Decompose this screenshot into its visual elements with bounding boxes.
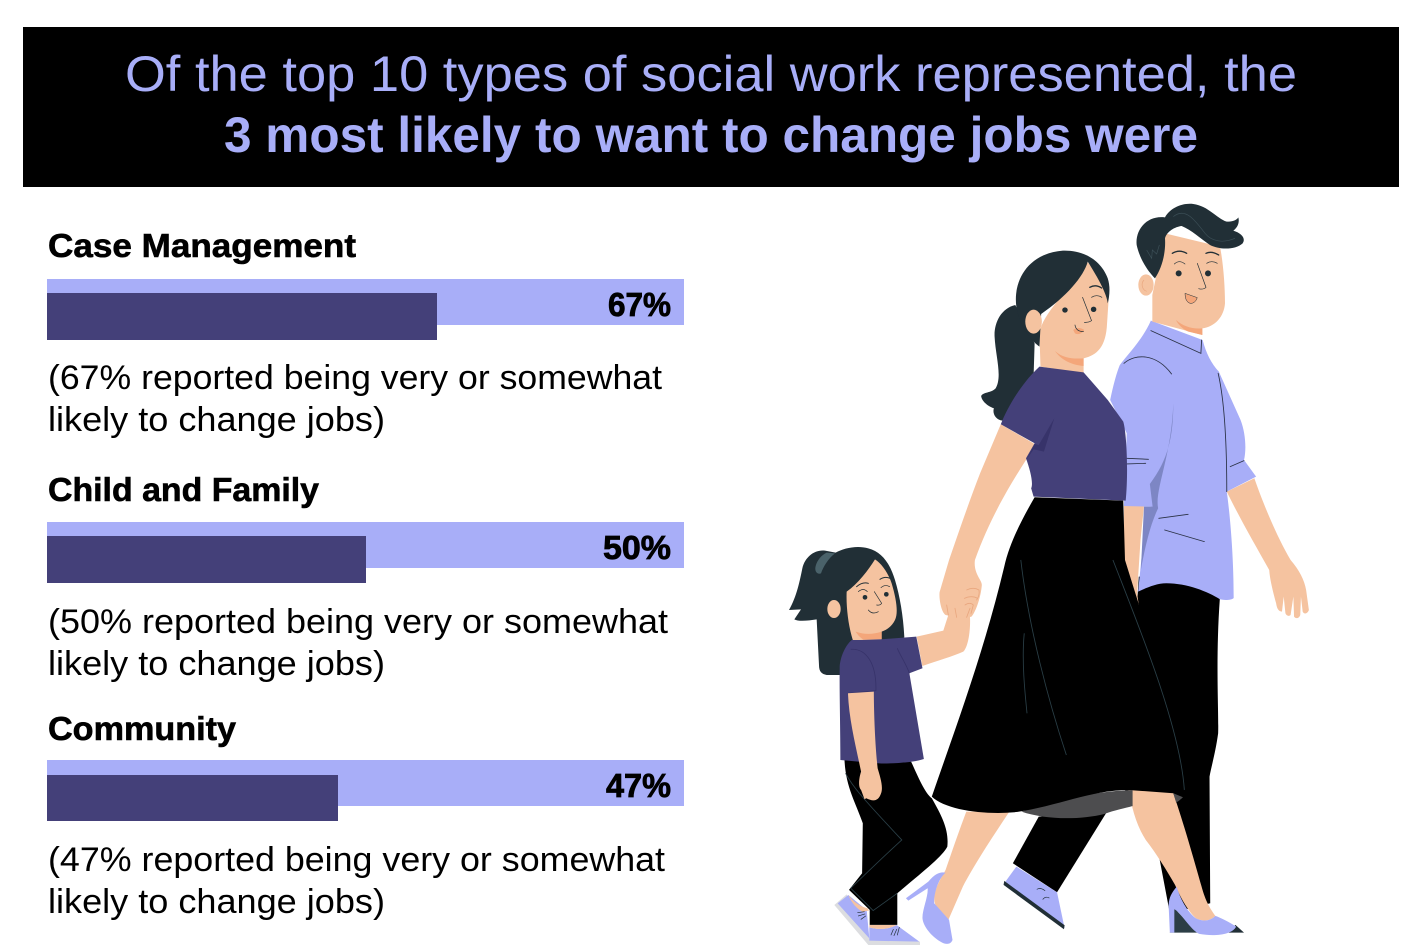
text: community description: likely to change jobs): [48, 883, 385, 921]
heading: community: Community: [48, 710, 237, 747]
bar: community 47%: [47, 760, 684, 821]
text: child and family description: likely to change jobs): [48, 645, 385, 683]
heading: child and family: Child and Family: [48, 471, 320, 508]
text: case management description: likely to change jobs): [48, 401, 385, 439]
figure: man: [1004, 204, 1309, 929]
illustration: family walking: [789, 204, 1309, 945]
bar: case management 67%: [47, 279, 684, 340]
title banner: 3 most likely to want to change jobs were: [224, 107, 1198, 163]
text: community description: (47% reported being very or somewhat: [48, 841, 666, 879]
heading: case management: Case Management: [48, 227, 356, 264]
bar: community 47%: 47%: [606, 767, 671, 804]
panel: child and family: [47, 471, 684, 683]
text: case management description: (67% reported being very or somewhat: [48, 359, 663, 397]
figure: woman: [906, 251, 1244, 944]
panel: case management: [47, 227, 684, 439]
panel: community: [47, 710, 684, 921]
bar: child and family 50%: 50%: [603, 529, 671, 566]
girl's shoes: [834, 894, 920, 945]
title banner: [23, 27, 1399, 187]
bar: case management 67%: 67%: [608, 286, 671, 323]
figure: girl: [789, 547, 979, 945]
girl's head and raised arm: [789, 547, 979, 675]
bar: child and family 50%: [47, 522, 684, 583]
text: child and family description: (50% reported being very or somewhat: [48, 603, 669, 641]
title banner: Of the top 10 types of social work represented, the: [125, 46, 1297, 102]
man's head: [1137, 204, 1244, 335]
